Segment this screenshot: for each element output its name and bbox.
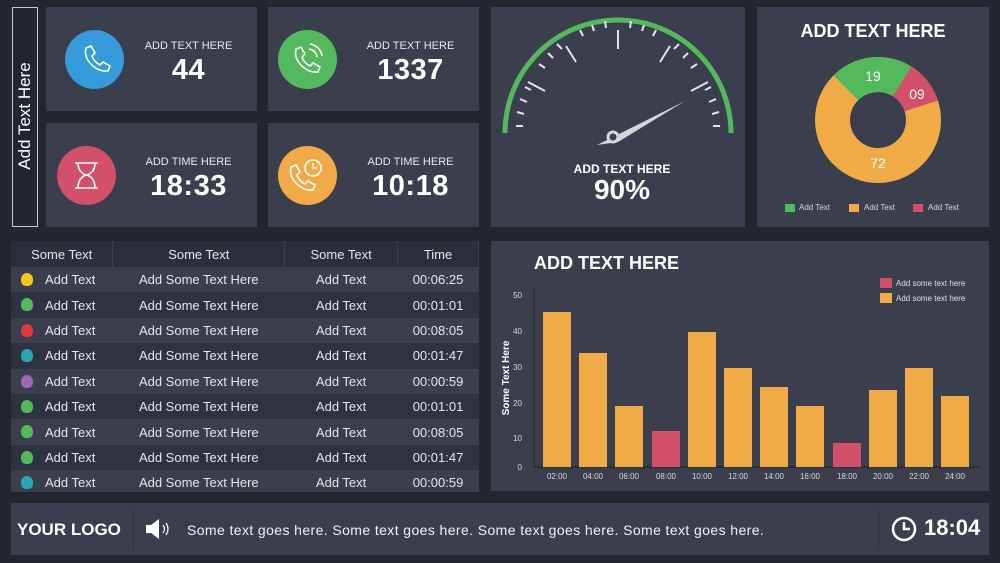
- icon: phone blue: [65, 30, 124, 89]
- icon: hourglass: [57, 146, 116, 205]
- icon: phone green: [278, 30, 337, 89]
- panel: table: 00:01:47: [413, 348, 463, 363]
- panel: table: 00:00:59: [413, 374, 463, 389]
- panel: table: Add Text: [316, 272, 366, 287]
- bar chart: 20: [513, 399, 523, 408]
- panel: table: Add Text: [316, 298, 366, 313]
- donut chart: 19: [865, 68, 881, 84]
- bar chart: 02:00: [547, 472, 568, 481]
- bar chart: 10: [513, 434, 523, 443]
- clock: [892, 515, 980, 542]
- chart title: ADD TEXT HERE: [534, 253, 679, 273]
- card: calls 44: 44: [172, 54, 205, 86]
- panel: table: Add Text: [45, 475, 95, 490]
- donut legend: [785, 203, 959, 212]
- card: calls 1337: 1337: [377, 54, 444, 86]
- icon: phone clock: [278, 146, 337, 205]
- bar chart: 20:00: [873, 472, 894, 481]
- card: calls 44: ADD TEXT HERE: [145, 40, 232, 52]
- bar chart: 16:00: [800, 472, 821, 481]
- panel: table: Add Text: [45, 323, 95, 338]
- panel: table: Add Text: [45, 399, 95, 414]
- panel: table: Add Text: [45, 272, 95, 287]
- donut chart: 72: [870, 155, 886, 171]
- legend: [880, 278, 892, 288]
- card: time 18:33: ADD TIME HERE: [146, 156, 231, 168]
- panel: donut: Add Text: [928, 203, 959, 212]
- logo: YOUR LOGO: [17, 520, 121, 539]
- icon: speaker: [146, 519, 169, 539]
- panel: table: Add Some Text Here: [139, 298, 259, 313]
- panel: donut: Add Text: [799, 203, 830, 212]
- panel: gauge: [491, 7, 745, 227]
- card: time 10:18: 10:18: [372, 170, 449, 202]
- bar chart: [501, 278, 980, 481]
- card: time 18:33: 18:33: [150, 170, 227, 202]
- panel: table: 00:00:59: [413, 475, 463, 490]
- bar chart: 12:00: [728, 472, 749, 481]
- bar chart: 08:00: [656, 472, 677, 481]
- panel: table: 00:01:01: [413, 399, 463, 414]
- panel: table: Add Text: [316, 323, 366, 338]
- panel: table: Some Text: [31, 246, 92, 262]
- ticker text: Some text goes here. Some text goes here. Some text goes here. Some text goes here.: [187, 522, 764, 538]
- panel: table: Add Some Text Here: [139, 374, 259, 389]
- panel: table: 00:06:25: [413, 272, 463, 287]
- panel: table: Add Some Text Here: [139, 450, 259, 465]
- panel: donut: Add Text: [864, 203, 895, 212]
- panel: table: Add Some Text Here: [139, 348, 259, 363]
- bar chart: 40: [513, 327, 523, 336]
- bar chart: Add some text here: [896, 279, 966, 288]
- bar chart: 30: [513, 363, 523, 372]
- bar chart: Some Text Here: [501, 340, 512, 415]
- bar chart: 24:00: [945, 472, 966, 481]
- panel: table: Some Text: [168, 246, 229, 262]
- bar chart: 10:00: [692, 472, 713, 481]
- panel: table: Add Text: [316, 399, 366, 414]
- panel: table: Add Text: [45, 425, 95, 440]
- card: time 10:18: ADD TIME HERE: [368, 156, 453, 168]
- panel: donut: [757, 7, 989, 227]
- panel: table: Add Some Text Here: [139, 272, 259, 287]
- card: calls 1337: ADD TEXT HERE: [367, 40, 454, 52]
- needle: [597, 101, 685, 145]
- panel: table: 00:08:05: [413, 425, 463, 440]
- panel: table: Add Text: [316, 425, 366, 440]
- donut title: ADD TEXT HERE: [800, 21, 946, 41]
- panel: table: Time: [424, 246, 452, 262]
- panel: table: Some Text: [310, 246, 372, 262]
- bar chart: 18:00: [837, 472, 858, 481]
- panel: table: 00:08:05: [413, 323, 463, 338]
- panel: table: Add Some Text Here: [139, 399, 259, 414]
- panel: table: Add Some Text Here: [139, 425, 259, 440]
- vertical label box: [12, 7, 38, 227]
- panel: table: 00:01:47: [413, 450, 463, 465]
- panel: table: Add Text: [45, 298, 95, 313]
- panel: table: Add Text: [316, 348, 366, 363]
- panel: table: Add Some Text Here: [139, 475, 259, 490]
- vertical label box: Add Text Here: [15, 62, 34, 170]
- panel: table: [11, 241, 479, 492]
- panel: table: Add Text: [316, 450, 366, 465]
- card: calls 44: [46, 7, 257, 111]
- bar chart: 04:00: [583, 472, 604, 481]
- panel: table: Add Text: [45, 450, 95, 465]
- bar chart: 14:00: [764, 472, 785, 481]
- panel: table: Add Text: [45, 374, 95, 389]
- card: time 18:33: [46, 123, 257, 227]
- panel: table: Add Text: [316, 475, 366, 490]
- bar chart: Add some text here: [896, 294, 966, 303]
- bar chart: 0: [518, 463, 523, 472]
- bar chart: 50: [513, 291, 523, 300]
- panel: table: Add Text: [45, 348, 95, 363]
- bar chart: 22:00: [909, 472, 930, 481]
- panel: table: Add Some Text Here: [139, 323, 259, 338]
- bar chart: 06:00: [619, 472, 640, 481]
- card: calls 1337: [268, 7, 479, 111]
- panel: table: 00:01:01: [413, 298, 463, 313]
- footer bar: [11, 503, 989, 555]
- panel: table: Add Text: [316, 374, 366, 389]
- clock: 18:04: [924, 515, 980, 540]
- gauge value: 90%: [594, 174, 650, 205]
- panel: bar chart: [491, 241, 989, 491]
- gauge label: ADD TEXT HERE: [574, 162, 670, 176]
- donut chart: [815, 57, 941, 183]
- card: time 10:18: [268, 123, 479, 227]
- donut chart: 09: [909, 86, 925, 102]
